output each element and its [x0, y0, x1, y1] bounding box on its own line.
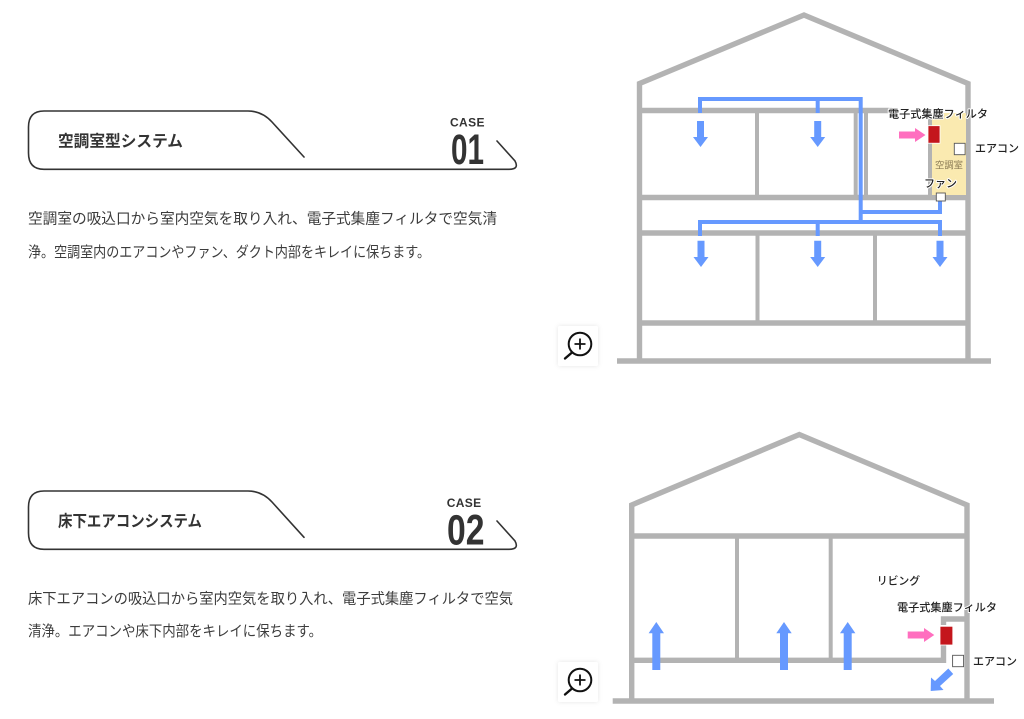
- air conditioner unit: [954, 143, 965, 155]
- ground line: [617, 358, 991, 364]
- house outline: [640, 15, 968, 361]
- arrow: diagonal outflow: [931, 668, 953, 691]
- air conditioner unit: [953, 655, 964, 667]
- text block: case 01 description: 浄。空調室内のエアコンやファン、ダクト内部をキレイに保ちます。: [28, 244, 430, 261]
- heading: case 02 title: 床下エアコンシステム: [58, 512, 202, 530]
- underfloor slab: [632, 645, 944, 660]
- text block: case 02 description: [28, 590, 513, 640]
- arrow: up middle: [776, 622, 792, 670]
- arrow: upper middle down: [810, 121, 825, 147]
- heading frame: case 02: [28, 491, 516, 549]
- label: air conditioner: エアコン: [973, 655, 1017, 668]
- house outline: [632, 434, 967, 701]
- text block: case 01 description: [28, 210, 497, 261]
- number: 01: 01: [451, 126, 484, 174]
- ground line: [613, 698, 994, 704]
- diagram: house case 01: [617, 15, 1019, 361]
- diagram: house case 02: [613, 434, 1017, 701]
- icon: zoom button case 02: [558, 662, 598, 702]
- air conditioning room: [932, 113, 966, 195]
- air conditioning room wall: [928, 118, 932, 197]
- arrow: up left: [649, 622, 664, 670]
- panel: case 02 description: [28, 491, 516, 640]
- filter opening wall: [944, 619, 967, 625]
- label: filter: 電子式集塵フィルタ: [897, 600, 997, 614]
- floors: [640, 110, 968, 323]
- text block: case 02 description: 床下エアコンの吸込口から室内空気を取り入れ、電子式集塵フィルタで空気: [28, 590, 513, 607]
- label: filter: 電子式集塵フィルタ: [888, 107, 988, 121]
- heading: case 01 title: 空調室型システム: [58, 132, 183, 150]
- electronic dust filter: [940, 626, 953, 645]
- arrow: intake pink: [908, 628, 934, 642]
- label: CASE: CASE: [447, 496, 481, 510]
- heading frame: case 01: [28, 111, 516, 169]
- ducts: [700, 99, 940, 236]
- electronic dust filter: [928, 126, 940, 143]
- text block: case 01 description: 空調室の吸込口から室内空気を取り入れ、電子式集塵フィルタで空気清: [28, 210, 497, 227]
- label: CASE: CASE: [450, 116, 484, 130]
- number: 02: 02: [447, 506, 484, 554]
- interior walls: [737, 536, 831, 660]
- label: air conditioner: エアコン: [975, 142, 1019, 155]
- text block: case 02 description: 清浄。エアコンや床下内部をキレイに保ちます。: [28, 623, 322, 640]
- arrow: lower left down: [694, 241, 708, 267]
- attic floor: [632, 533, 967, 539]
- label: fan: ファン: [924, 178, 957, 190]
- fan unit: [936, 193, 945, 201]
- arrow: upper left down: [693, 121, 708, 147]
- arrow: lower middle down: [810, 241, 825, 267]
- arrow: lower right down: [932, 241, 948, 267]
- panel: case 01 description: [28, 111, 516, 261]
- interior walls: [757, 110, 875, 323]
- arrow: up right: [840, 622, 855, 670]
- icon: zoom button case 01: [558, 326, 598, 366]
- arrow: intake pink: [899, 128, 926, 142]
- label: air conditioning room: 空調室: [935, 160, 963, 172]
- label: living: リビング: [877, 574, 920, 588]
